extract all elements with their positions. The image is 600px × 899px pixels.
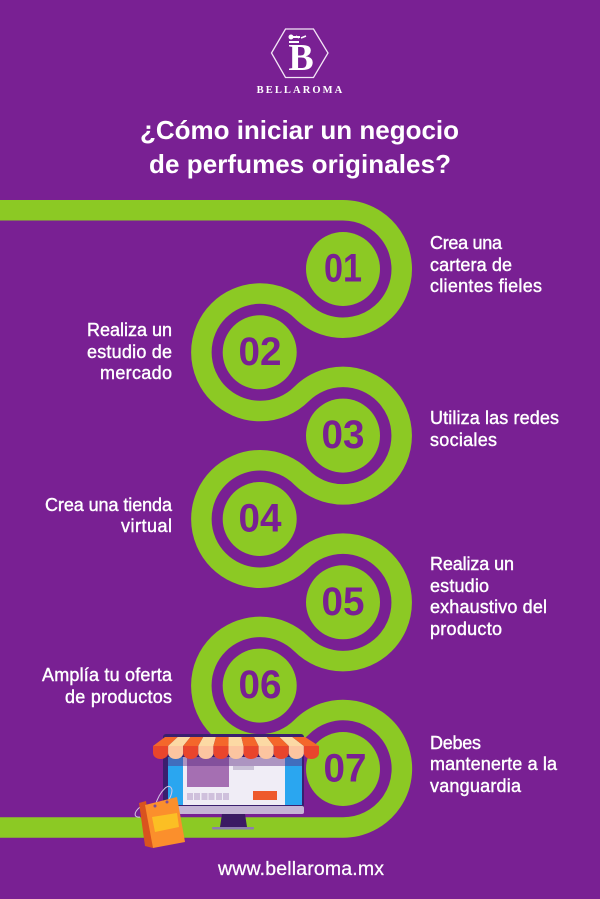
step 07 text: mantenerte a la: [430, 754, 558, 774]
step 02 badge: [223, 315, 297, 389]
logo: Bellaroma: B: [288, 37, 314, 79]
step 02 badge: 02: [238, 330, 282, 374]
step 02 text: estudio de: [87, 342, 172, 362]
step 06 text: de productos: [65, 687, 172, 707]
title: [140, 115, 459, 179]
step 07 text: vanguardia: [430, 776, 522, 796]
step 07 text: [430, 733, 558, 796]
step 05 text: estudio: [430, 576, 489, 596]
step 01 text: cartera de: [430, 255, 512, 275]
step 07 badge: 07: [324, 746, 366, 790]
step 05 text: [430, 554, 547, 639]
logo: Bellaroma: [257, 29, 344, 96]
step 05 text: exhaustivo del: [430, 597, 547, 617]
monitor frame: [163, 734, 304, 814]
winding green path: [0, 210, 402, 828]
step 01 text: [430, 233, 542, 296]
step 02 text: Realiza un: [87, 320, 172, 340]
step 06 badge: [223, 649, 297, 723]
step 03 badge: [306, 399, 380, 473]
step 02 text: mercado: [100, 363, 172, 383]
step 05 text: producto: [430, 619, 502, 639]
website footer: www.bellaroma.mx: [217, 858, 384, 880]
step 01 text: Crea una: [430, 233, 503, 253]
step 03 text: [430, 408, 559, 450]
step 01 text: clientes fieles: [430, 276, 542, 296]
step 06 text: Amplía tu oferta: [42, 665, 173, 685]
step 05 badge: [306, 565, 380, 639]
title: de perfumes originales?: [149, 149, 451, 179]
step 04 text: Crea una tienda: [45, 495, 173, 515]
logo: Bellaroma: BELLAROMA: [257, 85, 344, 96]
step 03 text: Utiliza las redes: [430, 408, 559, 428]
step 07 text: Debes: [430, 733, 481, 753]
step 04 text: virtual: [121, 516, 172, 536]
step 06 text: [42, 665, 173, 707]
step 07 badge: [306, 732, 380, 806]
monitor stand: [212, 814, 254, 830]
monitor screen: [168, 757, 302, 805]
step 05 badge: 05: [322, 580, 364, 624]
step 05 text: Realiza un: [430, 554, 514, 574]
illustration: online shop monitor: [135, 734, 319, 848]
shopping bag: [135, 786, 185, 848]
step 04 text: [45, 495, 173, 536]
step 03 text: sociales: [430, 430, 497, 450]
step 04 badge: [223, 482, 297, 556]
step 03 badge: 03: [322, 413, 364, 457]
step 06 badge: 06: [238, 663, 282, 707]
step 02 text: [87, 320, 172, 383]
title: ¿Cómo iniciar un negocio: [140, 115, 459, 145]
step 01 badge: [306, 232, 380, 306]
step 04 badge: 04: [238, 496, 282, 540]
step 01 badge: 01: [324, 246, 362, 290]
striped awning: [153, 737, 319, 759]
